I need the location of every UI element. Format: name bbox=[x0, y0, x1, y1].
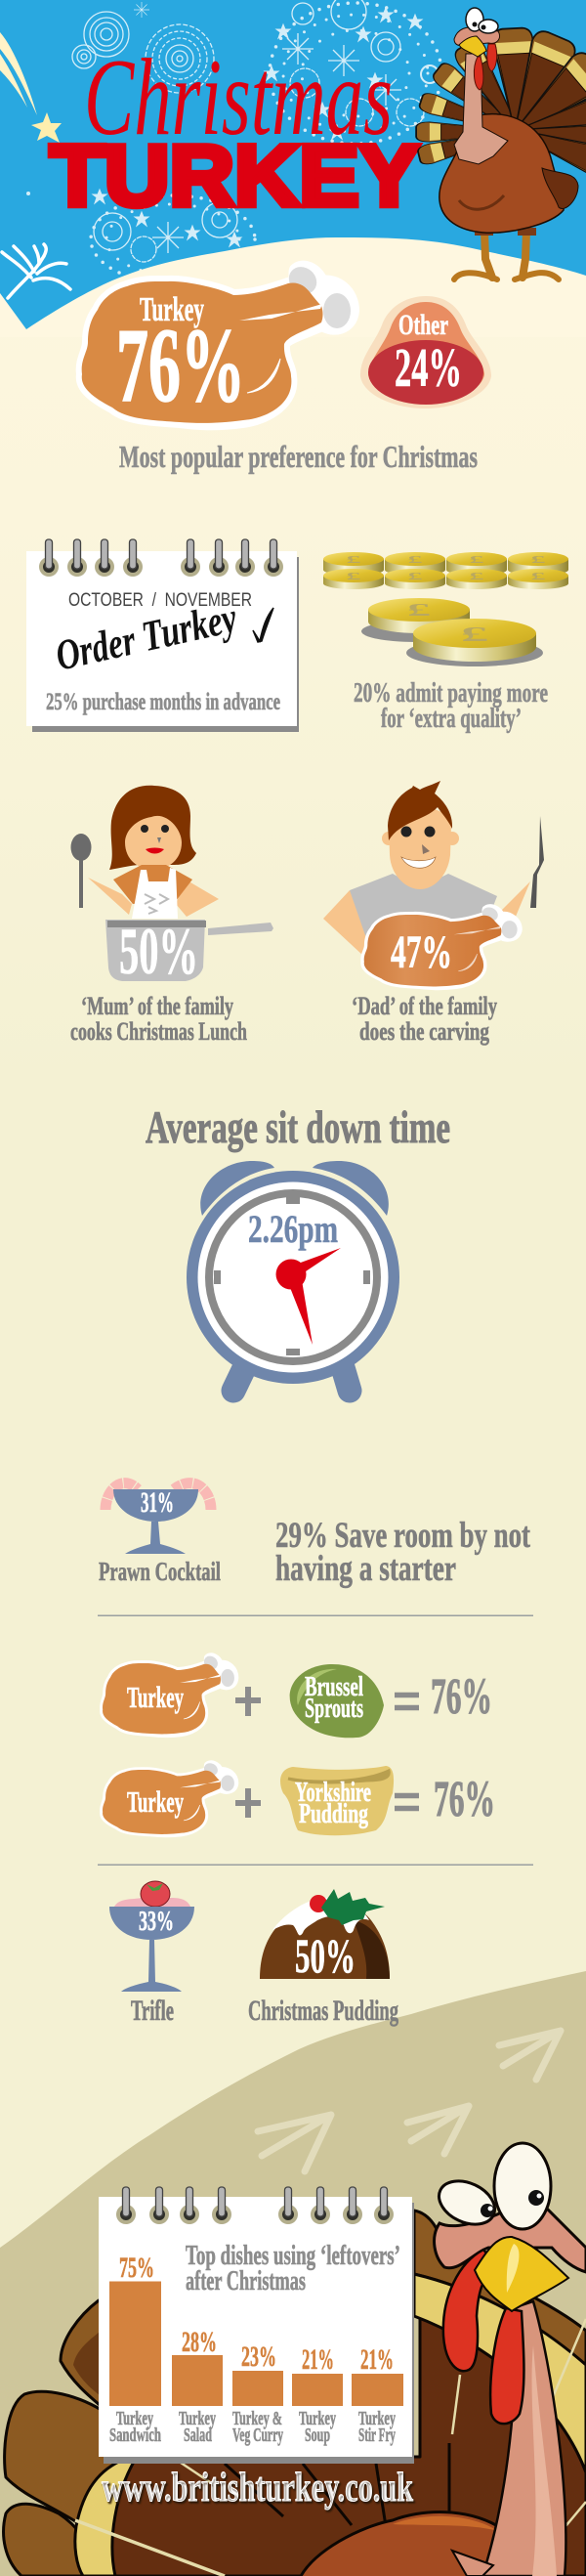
wattled neck and bib bbox=[454, 54, 508, 164]
label: trifle: Trifle bbox=[131, 1995, 174, 2027]
head bbox=[435, 2194, 586, 2272]
time: 2.26pm bbox=[248, 1207, 338, 1251]
caption: mum cooks bbox=[70, 992, 247, 1046]
icon: pound coins bbox=[323, 552, 568, 666]
value: 76%: 76% bbox=[116, 308, 245, 424]
equation: turkey plus brussel sprouts bbox=[103, 1653, 492, 1738]
illustration: mum with pot bbox=[70, 786, 273, 988]
heading: average sit down time: Average sit down time bbox=[146, 1102, 450, 1153]
calendar rings bbox=[39, 539, 283, 577]
tail feathers bbox=[416, 27, 586, 183]
sprout: Brussel bbox=[305, 1671, 363, 1702]
handwritten note: Order Turkey bbox=[52, 593, 241, 680]
prawns bbox=[105, 1483, 211, 1510]
label: Other: Other bbox=[398, 309, 448, 341]
footprint hill bbox=[0, 1971, 586, 2576]
bar chart: Stir Fry bbox=[358, 2425, 396, 2446]
neck bbox=[482, 2301, 565, 2576]
turkey bbox=[103, 1761, 235, 1835]
icon: pound coins: £ bbox=[531, 570, 545, 581]
value: 76% bbox=[431, 1669, 492, 1725]
caption: dad carves: does the carving bbox=[359, 1017, 489, 1046]
bar chart: Soup bbox=[305, 2425, 330, 2446]
legs and feet bbox=[454, 231, 559, 279]
eyes bbox=[432, 2143, 551, 2233]
title: TURKEY: TURKEY bbox=[50, 127, 419, 224]
label: prawn cocktail: Prawn Cocktail bbox=[99, 1557, 221, 1586]
yorkshire pudding: Yorkshire bbox=[295, 1777, 371, 1808]
bar chart: Salad bbox=[184, 2425, 212, 2446]
spoon bbox=[70, 834, 92, 908]
bar chart: 28% bbox=[182, 2326, 217, 2358]
bar chart: 75% bbox=[119, 2252, 154, 2284]
icon: pound coins: £ bbox=[347, 553, 360, 565]
beak bbox=[475, 2237, 568, 2311]
icon: pound coins: £ bbox=[531, 553, 545, 565]
icon: alarm clock bbox=[187, 1161, 399, 1391]
bells and feet bbox=[200, 1161, 389, 1391]
face bbox=[125, 816, 182, 870]
chart: turkey 76% drumstick bbox=[82, 261, 354, 424]
icon: pound coins: £ bbox=[408, 553, 422, 565]
icon: pound coins: £ bbox=[461, 623, 488, 646]
knife bbox=[530, 816, 544, 908]
turkey bbox=[103, 1653, 235, 1735]
turkey: Turkey bbox=[127, 1784, 184, 1819]
icon: bird footprints bbox=[258, 2031, 561, 2171]
body bbox=[299, 2512, 547, 2576]
blouse and apron bbox=[113, 865, 192, 919]
arms bbox=[88, 878, 219, 917]
bar chart: Turkey bbox=[299, 2408, 336, 2429]
turkey: Turkey bbox=[127, 1680, 184, 1714]
sprout bbox=[290, 1664, 384, 1738]
plus bbox=[235, 1788, 261, 1818]
chart title bbox=[186, 2241, 400, 2297]
icon: trifle glass bbox=[109, 1881, 194, 1992]
icon: christmas pudding bbox=[260, 1889, 390, 1983]
illustration: large turkey bbox=[4, 2143, 586, 2576]
caption: 20% admit paying more bbox=[354, 678, 548, 734]
bar chart bbox=[109, 2252, 403, 2446]
title: Christmas: Christmas bbox=[84, 37, 393, 158]
caption: mum cooks: ‘Mum’ of the family bbox=[81, 992, 233, 1020]
bar chart: Turkey bbox=[116, 2408, 153, 2429]
bar chart: 23% bbox=[241, 2340, 276, 2373]
text: save room bbox=[275, 1516, 530, 1589]
caption: dad carves: ‘Dad’ of the family bbox=[352, 992, 497, 1020]
bar chart: Turkey bbox=[358, 2408, 396, 2429]
value: 33% bbox=[139, 1906, 174, 1937]
yorkshire pudding: Pudding bbox=[299, 1798, 368, 1829]
arms bbox=[323, 881, 530, 956]
chart: other meat 24% bbox=[360, 296, 491, 408]
sprout: Sprouts bbox=[305, 1693, 363, 1724]
head bbox=[382, 781, 459, 889]
cream hill curve bbox=[0, 237, 586, 337]
value: 47%: 47% bbox=[391, 926, 452, 978]
equals bbox=[395, 1796, 419, 1808]
icon: white fern bbox=[2, 244, 70, 298]
chart title: after Christmas bbox=[186, 2266, 306, 2297]
caption: dad carves bbox=[352, 992, 497, 1046]
yorkshire pudding bbox=[280, 1766, 394, 1835]
value: 24%: 24% bbox=[395, 338, 462, 399]
equation: turkey plus yorkshire pudding bbox=[103, 1761, 495, 1835]
equals bbox=[395, 1695, 419, 1708]
icon: prawn cocktail glass bbox=[105, 1483, 211, 1554]
caption: 20% admit paying more: for ‘extra quality’ bbox=[381, 704, 522, 734]
text: save room: having a starter bbox=[275, 1549, 456, 1589]
label: Turkey: Turkey bbox=[140, 290, 204, 328]
bar chart: Turkey bbox=[179, 2408, 216, 2429]
bar chart: 21% bbox=[302, 2343, 334, 2376]
tick mark bbox=[253, 608, 273, 642]
label: christmas pudding: Christmas Pudding bbox=[248, 1995, 398, 2027]
pot bbox=[105, 920, 273, 981]
months: OCTOBER / NOVEMBER bbox=[68, 590, 252, 611]
wattles bbox=[443, 2250, 523, 2424]
caption: 25% purchase months in advance bbox=[46, 689, 280, 715]
plus bbox=[235, 1687, 261, 1716]
panel: order calendar bbox=[26, 539, 299, 732]
icon: pound coins: £ bbox=[407, 600, 431, 620]
header: blue sky panel bbox=[0, 0, 586, 337]
panel: leftovers calendar chart bbox=[99, 2187, 414, 2464]
tail feathers bbox=[4, 2211, 586, 2576]
roast turkey bbox=[364, 905, 519, 987]
clock hands bbox=[275, 1248, 341, 1345]
illustration: cartoon turkey bbox=[416, 8, 586, 279]
icon: pound coins: £ bbox=[347, 570, 360, 581]
bar chart: Sandwich bbox=[109, 2425, 161, 2446]
snowflake doodles bbox=[26, 0, 441, 283]
calendar rings bbox=[116, 2187, 394, 2224]
bar chart: Turkey & bbox=[232, 2408, 282, 2429]
illustration: dad carving bbox=[323, 781, 544, 987]
head with eyes and beak bbox=[454, 8, 500, 90]
value: 50% bbox=[295, 1928, 356, 1983]
feather quills bbox=[75, 2319, 586, 2576]
bar chart: 21% bbox=[360, 2343, 394, 2376]
value: 50%: 50% bbox=[119, 914, 198, 988]
website url: www.britishturkey.co.uk bbox=[102, 2466, 413, 2511]
value: 31% bbox=[141, 1486, 174, 1519]
caption: mum cooks: cooks Christmas Lunch bbox=[70, 1017, 247, 1046]
icon: comet tail and star bbox=[0, 32, 62, 143]
value: 76% bbox=[434, 1772, 495, 1827]
icon: pound coins: £ bbox=[470, 570, 483, 581]
icon: pound coins: £ bbox=[408, 570, 422, 581]
hair bbox=[109, 786, 196, 870]
body bbox=[440, 114, 564, 233]
chart title: Top dishes using ‘leftovers’ bbox=[186, 2241, 400, 2271]
shirt bbox=[350, 874, 497, 938]
bar chart: Veg Curry bbox=[232, 2425, 283, 2446]
icon: pound coins: £ bbox=[470, 553, 483, 565]
